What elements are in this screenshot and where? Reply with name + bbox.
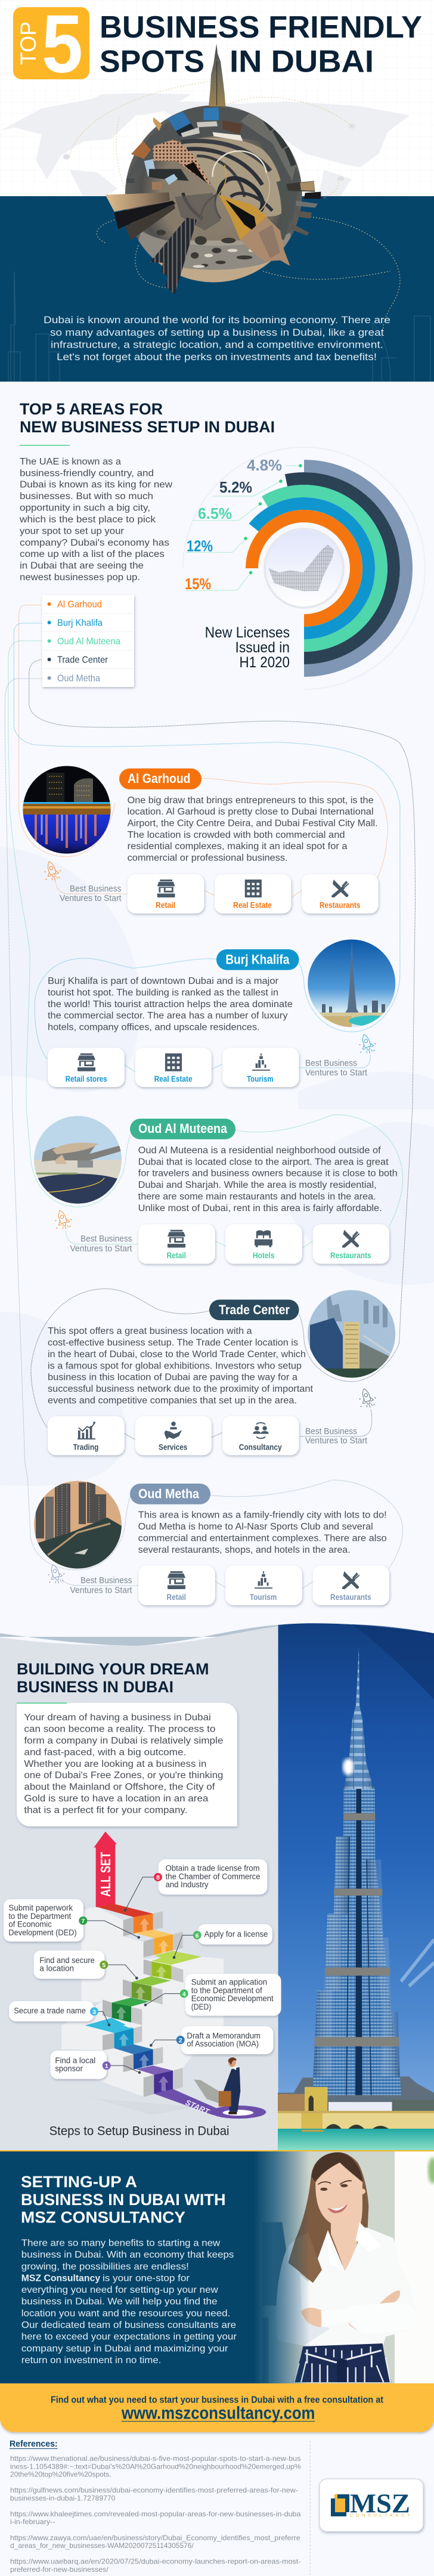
- text: MSZ consultancy: location you want and the resources you need.: [21, 2309, 230, 2318]
- references: https://www.khaleejtimes.com/revealed-most-popular-areas-for-new-businesses-in-duba: [10, 2510, 301, 2518]
- callout: step 7: of Economic: [8, 1920, 52, 1929]
- heading: setting-up: SETTING-UP A: [21, 2173, 137, 2191]
- legend card: Burj Khalifa: [57, 618, 103, 628]
- paragraph: UAE: [19, 457, 173, 583]
- callout: step 6: 6: [196, 1932, 199, 1939]
- cards: Oud Al Muteena ventures: Restaurants: [330, 1251, 371, 1260]
- cards: Trade Center ventures: [48, 1416, 299, 1455]
- text: Oud Metha: This area is known as a family-friendly city with lots to do!: [138, 1510, 387, 1521]
- text card: dream business: about the Mainland or Offshore, the City of: [24, 1782, 215, 1792]
- text: Trade Center: in the heart of Dubai, close to the World Trade Center, which: [48, 1349, 306, 1360]
- legend card: Al Garhoud: [57, 600, 102, 610]
- text: Al Garhoud: One big draw that brings entrepreneurs to this spot, is the: [128, 795, 374, 806]
- radial bar chart: new licenses: 15%: [185, 575, 211, 593]
- callout: step 4: to the Department of: [191, 1986, 262, 1995]
- paragraph: UAE: in Dubai that are seeing the: [20, 561, 144, 571]
- text card: dream business: [17, 1703, 237, 1826]
- text: Oud Al Muteena: Unlike most of Dubai, rent in this area is fairly affordable.: [138, 1203, 382, 1213]
- heading: building your dream: BUILDING YOUR DREAM: [17, 1660, 209, 1678]
- callout: step 8: and Industry: [166, 1880, 209, 1889]
- callout: step 5: Find and secure: [39, 1956, 95, 1965]
- text: Al Garhoud: [128, 795, 378, 863]
- text card: dream business: Whether you are looking at a business in: [24, 1759, 206, 1769]
- cards: Trade Center ventures: Services: [159, 1443, 187, 1452]
- caption: best business ventures: Ventures to Start: [70, 1244, 132, 1253]
- references: https://www.thenational.ae/business/dubai-s-five-most-popular-spots-to-start-a-new-bus: [10, 2454, 300, 2463]
- call to action band: Find out what you need to start your business in Dubai with a free consultation at: [51, 2395, 384, 2405]
- references: https://gulfnews.com/business/dubai-economy-identifies-most-preferred-areas-for-new-: [10, 2486, 298, 2494]
- text: MSZ consultancy: is your one-stop for: [103, 2273, 190, 2283]
- top 5 badge: 5: [42, 0, 83, 90]
- photo: Burj Khalifa: [308, 939, 396, 1029]
- caption: best business ventures: Best Business: [305, 1427, 357, 1436]
- paragraph: UAE: come up with a list of the places: [20, 549, 165, 559]
- text: Oud Al Muteena: [138, 1145, 398, 1213]
- badge: Burj Khalifa: [216, 949, 299, 970]
- cards: Trade Center ventures: Trading: [73, 1443, 98, 1452]
- text: Burj Khalifa: Burj Khalifa is part of downtown Dubai and is a major: [48, 976, 278, 986]
- caption: best business ventures: Ventures to Start: [305, 1069, 367, 1078]
- legend card: Trade Center: [57, 655, 108, 665]
- text: Oud Metha: [138, 1510, 387, 1555]
- text: MSZ consultancy: [21, 2238, 237, 2366]
- text: Burj Khalifa: the world! This tourist attraction helps the area dominate: [48, 999, 293, 1010]
- radial bar chart: new licenses: H1 2020: [240, 654, 290, 671]
- callout: step 8: 8: [156, 1874, 160, 1881]
- callout: step 1: [50, 2051, 111, 2079]
- text card: dream business: and fast-paced, with a big outcome.: [24, 1747, 186, 1757]
- connector lines: [83, 1877, 197, 2073]
- text: MSZ consultancy: business in Dubai. We will help you find the: [21, 2297, 218, 2307]
- text card: dream business: one of Dubai's Free Zones, or you're thinking: [24, 1770, 223, 1781]
- intro text: so many advantages of setting up a business in Dubai, like a great: [50, 327, 384, 338]
- legend card: [42, 595, 134, 687]
- badge: Oud Al Muteena: Oud Al Muteena: [138, 1121, 228, 1136]
- callout: step 4: Economic Development: [191, 1994, 274, 2003]
- header background with grid: [0, 0, 434, 196]
- paragraph: UAE: company? Dubai's economy has: [20, 538, 169, 548]
- label: start: START: [184, 2098, 211, 2116]
- text card: dream business: Your dream of having a business in Dubai: [24, 1713, 211, 1723]
- intro text: Dubai is known around the world for its booming economy. There are: [44, 314, 390, 326]
- text: MSZ consultancy: MSZ Consultancy: [21, 2273, 100, 2283]
- intro text: [44, 314, 390, 363]
- text card: dream business: Gold is sure to have a location in an area: [24, 1794, 209, 1804]
- badge: Oud Al Muteena: [130, 1119, 235, 1140]
- callout: step 8: Obtain a trade license from: [166, 1864, 260, 1873]
- callout: step 7: Development (DED): [8, 1928, 77, 1937]
- panel: MSZ consultancy background and photo: [0, 2150, 434, 2383]
- photo: Burj Khalifa tower: [278, 1623, 434, 2151]
- cards: Oud Metha ventures: Tourism: [250, 1593, 277, 1602]
- callout: step 4: [180, 1974, 281, 2015]
- text: Al Garhoud: Airport, the City Centre Deira, and Dubai Festival City Mall.: [128, 818, 378, 829]
- text: Oud Metha: several restaurants, shops, and hotels in the area.: [138, 1545, 351, 1555]
- caption: best business ventures: [305, 1427, 367, 1446]
- navy intro band: [0, 196, 434, 382]
- paragraph: UAE: which is the best place to pick: [19, 515, 156, 525]
- heading: setting-up: BUSINESS IN DUBAI WITH: [21, 2191, 226, 2209]
- radial bar chart: new licenses: 6.5%: [198, 504, 232, 522]
- panel: Trade Center: [48, 1290, 396, 1455]
- text: Oud Metha: commercial and entertainment complexes. There are also: [138, 1533, 387, 1543]
- text: Oud Al Muteena: for travelers and business owners because it is close to both: [138, 1169, 398, 1179]
- badge: Al Garhoud: [119, 769, 202, 789]
- references: 20the%20top%20five%20spots.: [10, 2470, 111, 2478]
- text: Trade Center: events and competitive companies that set up in the area.: [48, 1395, 297, 1406]
- photo: Al Garhoud night: [23, 766, 111, 855]
- radial bar chart: new licenses: 12%: [187, 537, 213, 555]
- icon: rocket: [358, 1033, 376, 1055]
- callout: step 8: [154, 1859, 267, 1894]
- text: Trade Center: is a famous spot for global exhibitions. Investors who setup: [48, 1361, 302, 1371]
- call to action band: [0, 2383, 434, 2432]
- panel: Oud Al Muteena: [33, 1116, 398, 1264]
- call to action band: www.mszconsultancy.com: [121, 2404, 315, 2423]
- text: Oud Al Muteena: Dubai and Sharjah. While the area is mostly residential,: [138, 1180, 377, 1190]
- cards: Oud Al Muteena ventures: Retail: [167, 1251, 186, 1260]
- text card: dream business: can soon become a reality. The process to: [24, 1724, 215, 1734]
- text: Al Garhoud: commercial or professional business.: [128, 853, 288, 863]
- text: Al Garhoud: The location is crowded with both commercial and: [128, 830, 345, 840]
- badge: Oud Metha: [130, 1484, 210, 1504]
- references: [10, 2439, 310, 2575]
- badge: Burj Khalifa: Burj Khalifa: [225, 952, 290, 967]
- photo: Trade Center skyline: [308, 1290, 396, 1380]
- title: BUSINESS FRIENDLY: [100, 10, 422, 45]
- panel: Burj Khalifa: [48, 939, 396, 1087]
- caption: best business ventures: Best Business: [305, 1059, 357, 1069]
- text: MSZ consultancy: Our dedicated team of business consultants are: [21, 2320, 236, 2330]
- radial bar chart: new licenses: 5.2%: [219, 478, 252, 496]
- panel: Oud Metha: [33, 1481, 389, 1605]
- paragraph: UAE: businesses. But with so much: [20, 491, 153, 501]
- heading: building your dream: BUSINESS IN DUBAI: [17, 1678, 173, 1696]
- text: Oud Al Muteena: Oud Al Muteena is a residential neighborhood outside of: [138, 1145, 381, 1156]
- callout: step 3: Secure a trade name: [14, 2006, 86, 2015]
- callout: step 5: 5: [102, 1962, 106, 1969]
- cards: Oud Al Muteena ventures: [138, 1224, 389, 1264]
- figure: businessman: [194, 2057, 240, 2114]
- references: businesses-in-dubai-1.72789770: [10, 2494, 116, 2502]
- callout: step 7: to the Department: [8, 1912, 72, 1921]
- paragraph: UAE: business-friendly country, and: [20, 468, 154, 478]
- title: SPOTS: [100, 45, 204, 79]
- legend card: Oud Al Muteena: [57, 637, 120, 647]
- references: https://www.zawya.com/uae/en/business/story/Dubai_Economy_identifies_most_preferre: [10, 2534, 300, 2542]
- cards: Al Garhoud ventures: [128, 874, 379, 914]
- callout: step 3: 3: [92, 2008, 96, 2015]
- callout: step 3: [9, 2001, 98, 2021]
- badge: Oud Metha: Oud Metha: [138, 1486, 200, 1501]
- callout: step 1: sponsor: [55, 2064, 83, 2073]
- decorative skyline: [8, 271, 430, 382]
- cards: Al Garhoud ventures: Retail: [156, 901, 175, 910]
- caption: best business ventures: Ventures to Start: [60, 894, 122, 903]
- references: i-in-february--: [10, 2518, 55, 2526]
- caption: best business ventures: Best Business: [80, 1576, 132, 1586]
- caption: best business ventures: [70, 1234, 132, 1253]
- text: Trade Center: business in this location of Dubai are paving the way for a: [48, 1373, 297, 1383]
- radial bar chart: new licenses: Issued in: [235, 639, 290, 656]
- text: MSZ consultancy: business in Dubai. With an economy that keeps: [21, 2250, 234, 2260]
- radial bar chart: new licenses: 4.8%: [247, 456, 282, 474]
- caption: best business ventures: [305, 1059, 367, 1078]
- legend card: Oud Metha: [57, 674, 100, 684]
- callout: step 1: Find a local: [55, 2056, 95, 2065]
- caption: best business ventures: [70, 1576, 132, 1595]
- photo: consultant: [262, 2152, 416, 2383]
- badge: Trade Center: Trade Center: [219, 1302, 290, 1317]
- world map: [0, 93, 410, 196]
- staircase diagram: [48, 1832, 266, 2119]
- icon: rocket: [358, 1387, 376, 1409]
- icon: rocket: [54, 1209, 72, 1231]
- text: Oud Al Muteena: there are some main restaurants and hotels in the area.: [138, 1191, 376, 1202]
- references: d_areas_for_new_businesses-WAM20200725114305576/: [10, 2541, 194, 2550]
- callout: step 6: Apply for a license: [204, 1930, 268, 1939]
- callout: step 6: [193, 1924, 272, 1945]
- text: Al Garhoud: residential complexes, making it an ideal spot for a: [128, 841, 348, 852]
- callout: step 2: of Association (MOA): [187, 2039, 259, 2048]
- references: preferred-for-new-businesses/: [10, 2565, 108, 2574]
- heading: setting-up: MSZ CONSULTANCY: [21, 2209, 185, 2227]
- panel: Al Garhoud: [23, 766, 379, 914]
- heading: top 5 areas: NEW BUSINESS SETUP IN DUBAI: [20, 418, 275, 436]
- cards: Burj Khalifa ventures: [48, 1048, 299, 1087]
- callout: step 7: 7: [81, 1918, 85, 1925]
- icon: rocket: [47, 1563, 64, 1585]
- text card: dream business: form a company in Dubai is relatively simple: [24, 1736, 223, 1746]
- caption: best business ventures: Best Business: [70, 884, 121, 894]
- navy gradient overlay: [0, 2150, 310, 2383]
- cards: Al Garhoud ventures: Restaurants: [320, 901, 360, 910]
- cards: Al Garhoud ventures: Real Estate: [233, 901, 272, 910]
- text: Burj Khalifa: the commercial sector. The area has a number of luxury: [48, 1011, 288, 1021]
- text: MSZ consultancy: everything you need for setting-up your new: [21, 2285, 218, 2295]
- callout: step 4: (DED): [191, 2002, 211, 2011]
- caption: best business ventures: Ventures to Start: [70, 1586, 132, 1595]
- cards: Burj Khalifa ventures: Tourism: [247, 1075, 274, 1083]
- title: IN DUBAI: [230, 45, 374, 79]
- wave and building section background: [0, 1625, 278, 2150]
- radial bar chart: new licenses: New Licenses: [205, 624, 290, 641]
- intro text: Let's not forget about the perks on investments and tax benefits!: [57, 351, 377, 363]
- text: MSZ consultancy: growing, the possibilities are endless!: [21, 2262, 189, 2272]
- text: Trade Center: [48, 1326, 314, 1406]
- badge: Trade Center: [209, 1300, 299, 1320]
- callout: step 7: [4, 1899, 87, 1942]
- logo card: MSZ: [320, 2479, 423, 2532]
- logo card: MSZ: CONSULTANCY: [350, 2514, 410, 2518]
- cards: Oud Metha ventures: Retail: [167, 1593, 186, 1602]
- paragraph: UAE: opportunity in such a big city,: [20, 503, 150, 513]
- heading: building your dream: [17, 1660, 209, 1696]
- caption: best business ventures: Best Business: [80, 1234, 132, 1244]
- references: References:: [10, 2439, 58, 2449]
- badge: Al Garhoud: Al Garhoud: [128, 771, 191, 786]
- orbit dotted lines: [69, 81, 400, 330]
- heading: setting-up: [21, 2173, 226, 2227]
- cards: Oud Metha ventures: [138, 1566, 389, 1605]
- paragraph: UAE: newest businesses pop up.: [20, 572, 140, 583]
- callout: step 8: the Chamber of Commerce: [166, 1872, 261, 1881]
- text: MSZ consultancy: return on investment in no time.: [21, 2355, 161, 2366]
- callout: step 5: [33, 1950, 108, 1979]
- paragraph: UAE: your spot to set up your: [20, 527, 124, 537]
- paragraph: UAE: The UAE is known as a: [20, 457, 121, 467]
- text: Trade Center: This spot offers a great business location with a: [48, 1326, 252, 1336]
- text: Oud Metha: Oud Metha is home to Al-Nasr Sports Club and several: [138, 1522, 373, 1532]
- photo: marina at dusk: [33, 1481, 123, 1570]
- text: MSZ consultancy: There are so many benefits to starting a new: [21, 2238, 221, 2248]
- cards: Oud Metha ventures: Restaurants: [330, 1593, 371, 1602]
- text card: dream business: that is a perfect fit for your company.: [24, 1805, 187, 1815]
- logo card: MSZ: MSZ: [350, 2488, 410, 2518]
- text: MSZ consultancy: here to exceed your expectations in getting your: [21, 2332, 237, 2342]
- connector dotted lines across areas: [5, 605, 415, 1589]
- callout: step 5: a location: [39, 1964, 74, 1973]
- heading: top 5 areas: TOP 5 AREAS FOR: [20, 400, 163, 418]
- caption: best business ventures: Ventures to Start: [305, 1436, 367, 1446]
- callout: step 4: Submit an application: [191, 1977, 267, 1987]
- callout: step 2: 2: [179, 2037, 182, 2044]
- text: MSZ consultancy: company setup in Dubai and maximizing your: [21, 2343, 228, 2354]
- callout: step 1: 1: [105, 2063, 108, 2070]
- intro text: infrastructure, a strategic location, and a competitive environment.: [51, 339, 383, 351]
- heading: top 5 areas: [20, 400, 275, 446]
- callout: step 2: Draft a Memorandum: [187, 2031, 261, 2040]
- caption: best business ventures: [60, 884, 122, 903]
- callout: step 7: Submit paperwork: [8, 1903, 73, 1912]
- planet: little planet Dubai photo montage: [106, 44, 321, 295]
- text: Burj Khalifa: hotels, company offices, and upscale residences.: [48, 1022, 260, 1033]
- text: Burj Khalifa: tourist hot spot. The building is ranked as the tallest in: [48, 987, 278, 998]
- text: Burj Khalifa: [48, 976, 293, 1033]
- cards: Oud Al Muteena ventures: Hotels: [253, 1251, 275, 1260]
- text: Trade Center: successful business network due to the proximity of important: [48, 1384, 314, 1394]
- label: all set: ALL SET: [98, 1852, 113, 1897]
- title: [100, 10, 422, 79]
- photo: metro station: [33, 1116, 123, 1205]
- top 5 badge: [13, 0, 89, 90]
- arrow: all set: [94, 1832, 117, 1907]
- text: Al Garhoud: location. Al Garhoud is pretty close to Dubai International: [128, 807, 374, 817]
- text: Trade Center: cost-effective business setup. The Trade Center location is: [48, 1338, 298, 1348]
- references: https://www.uaebarq.ae/en/2020/07/25/dubai-economy-launches-report-on-areas-most-: [10, 2558, 301, 2566]
- icon: rocket: [44, 860, 61, 882]
- text: Oud Al Muteena: Dubai that is located close to the airport. The area is great: [138, 1157, 389, 1167]
- caption: steps: Steps to Setup Business in Dubai: [49, 2124, 230, 2138]
- callout: step 4: 4: [182, 1990, 186, 1998]
- soft background blobs: [0, 847, 434, 1486]
- callout: step 2: [176, 2026, 273, 2054]
- cards: Burj Khalifa ventures: Retail stores: [66, 1075, 107, 1083]
- references: iness-1.1054389#:~:text=Dubai's%20Al%20Garhoud%20neighbourhood%20emerged,up%: [10, 2462, 301, 2470]
- top 5 badge: TOP: [16, 21, 41, 65]
- paragraph: UAE: Dubai is known as its king for new: [20, 480, 173, 490]
- cards: Trade Center ventures: Consultancy: [239, 1443, 282, 1452]
- radial bar chart: new licenses: [183, 447, 425, 689]
- cards: Burj Khalifa ventures: Real Estate: [154, 1075, 193, 1083]
